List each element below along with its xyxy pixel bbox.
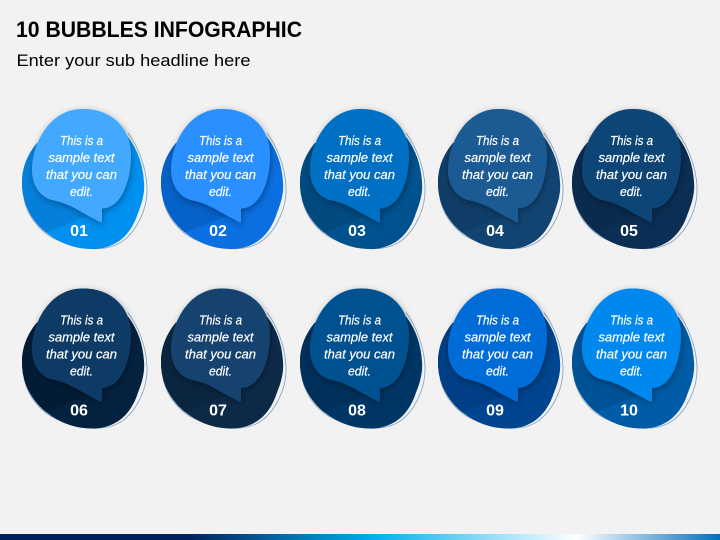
bubble text: that you can [596, 346, 667, 362]
bubble text [324, 133, 395, 199]
bubble text: edit. [348, 364, 371, 378]
bubble 08 [293, 288, 425, 428]
bubble text: This is a [610, 133, 653, 148]
bubble text: edit. [486, 364, 509, 378]
number: 02 [209, 223, 227, 240]
bubble text: edit. [620, 184, 643, 199]
bubble 09 [431, 288, 563, 428]
number: 07 [209, 402, 227, 420]
bubble text: that you can [462, 167, 533, 182]
bubble text: This is a [338, 133, 381, 148]
bubble text: edit. [70, 184, 93, 199]
title: 10 BUBBLES INFOGRAPHIC [16, 17, 302, 42]
bubble 02 [154, 109, 286, 249]
bubble text: sample text [598, 330, 666, 344]
bubble text [185, 133, 256, 199]
bubble text: This is a [476, 133, 519, 148]
number: 06 [70, 402, 88, 420]
bubble text: sample text [188, 150, 255, 165]
bubble text: sample text [326, 150, 394, 165]
bubble text: that you can [596, 167, 667, 182]
bubble text: edit. [348, 184, 371, 199]
bubble text [46, 133, 117, 199]
bubble text: This is a [476, 312, 519, 328]
sub headline: Enter your sub headline here [16, 51, 251, 70]
bubble text [596, 133, 667, 199]
number: 08 [348, 402, 366, 420]
bubble text [462, 312, 533, 378]
number: 04 [486, 223, 504, 240]
bubble text [596, 312, 667, 378]
bubble text: that you can [185, 167, 256, 182]
bubble text: sample text [464, 330, 532, 344]
bubble text: that you can [324, 167, 395, 182]
number: 03 [348, 223, 366, 240]
bubble text: sample text [464, 150, 532, 165]
bubble text: edit. [209, 364, 232, 378]
bottom gradient bar [0, 534, 720, 540]
bubble text: edit. [486, 184, 509, 199]
bubble text: that you can [324, 346, 395, 362]
bubble 05 [565, 109, 697, 249]
bubble 06 [15, 288, 147, 428]
number: 09 [486, 402, 504, 420]
bubble text: that you can [462, 346, 533, 362]
bubble text: This is a [338, 312, 381, 328]
bubble 01 [15, 109, 147, 249]
number: 01 [70, 223, 88, 240]
bubble text: sample text [48, 150, 116, 165]
bubble text: sample text [598, 150, 666, 165]
number: 10 [620, 402, 638, 420]
bubble text: sample text [48, 330, 116, 344]
bubble text: This is a [610, 312, 653, 328]
bubble 04 [431, 109, 563, 249]
bubble text: sample text [326, 330, 394, 344]
bubble 03 [293, 109, 425, 249]
bubble text: This is a [60, 312, 103, 328]
bubble text: edit. [209, 184, 232, 199]
bubble text [462, 133, 533, 199]
bubble 07 [154, 288, 286, 428]
bubble text: edit. [620, 364, 643, 378]
bubble text: This is a [60, 133, 103, 148]
bubble text: This is a [199, 312, 242, 328]
bubble text [185, 312, 256, 378]
bubble text: that you can [185, 346, 256, 362]
number: 05 [620, 223, 638, 240]
bubble text: sample text [188, 330, 255, 344]
bubble text: This is a [199, 133, 242, 148]
bubble text: that you can [46, 346, 117, 362]
bubble 10 [565, 288, 697, 428]
bubble text [46, 312, 117, 378]
bubble text: that you can [46, 167, 117, 182]
bubble text: edit. [70, 364, 93, 378]
bubble text [324, 312, 395, 378]
